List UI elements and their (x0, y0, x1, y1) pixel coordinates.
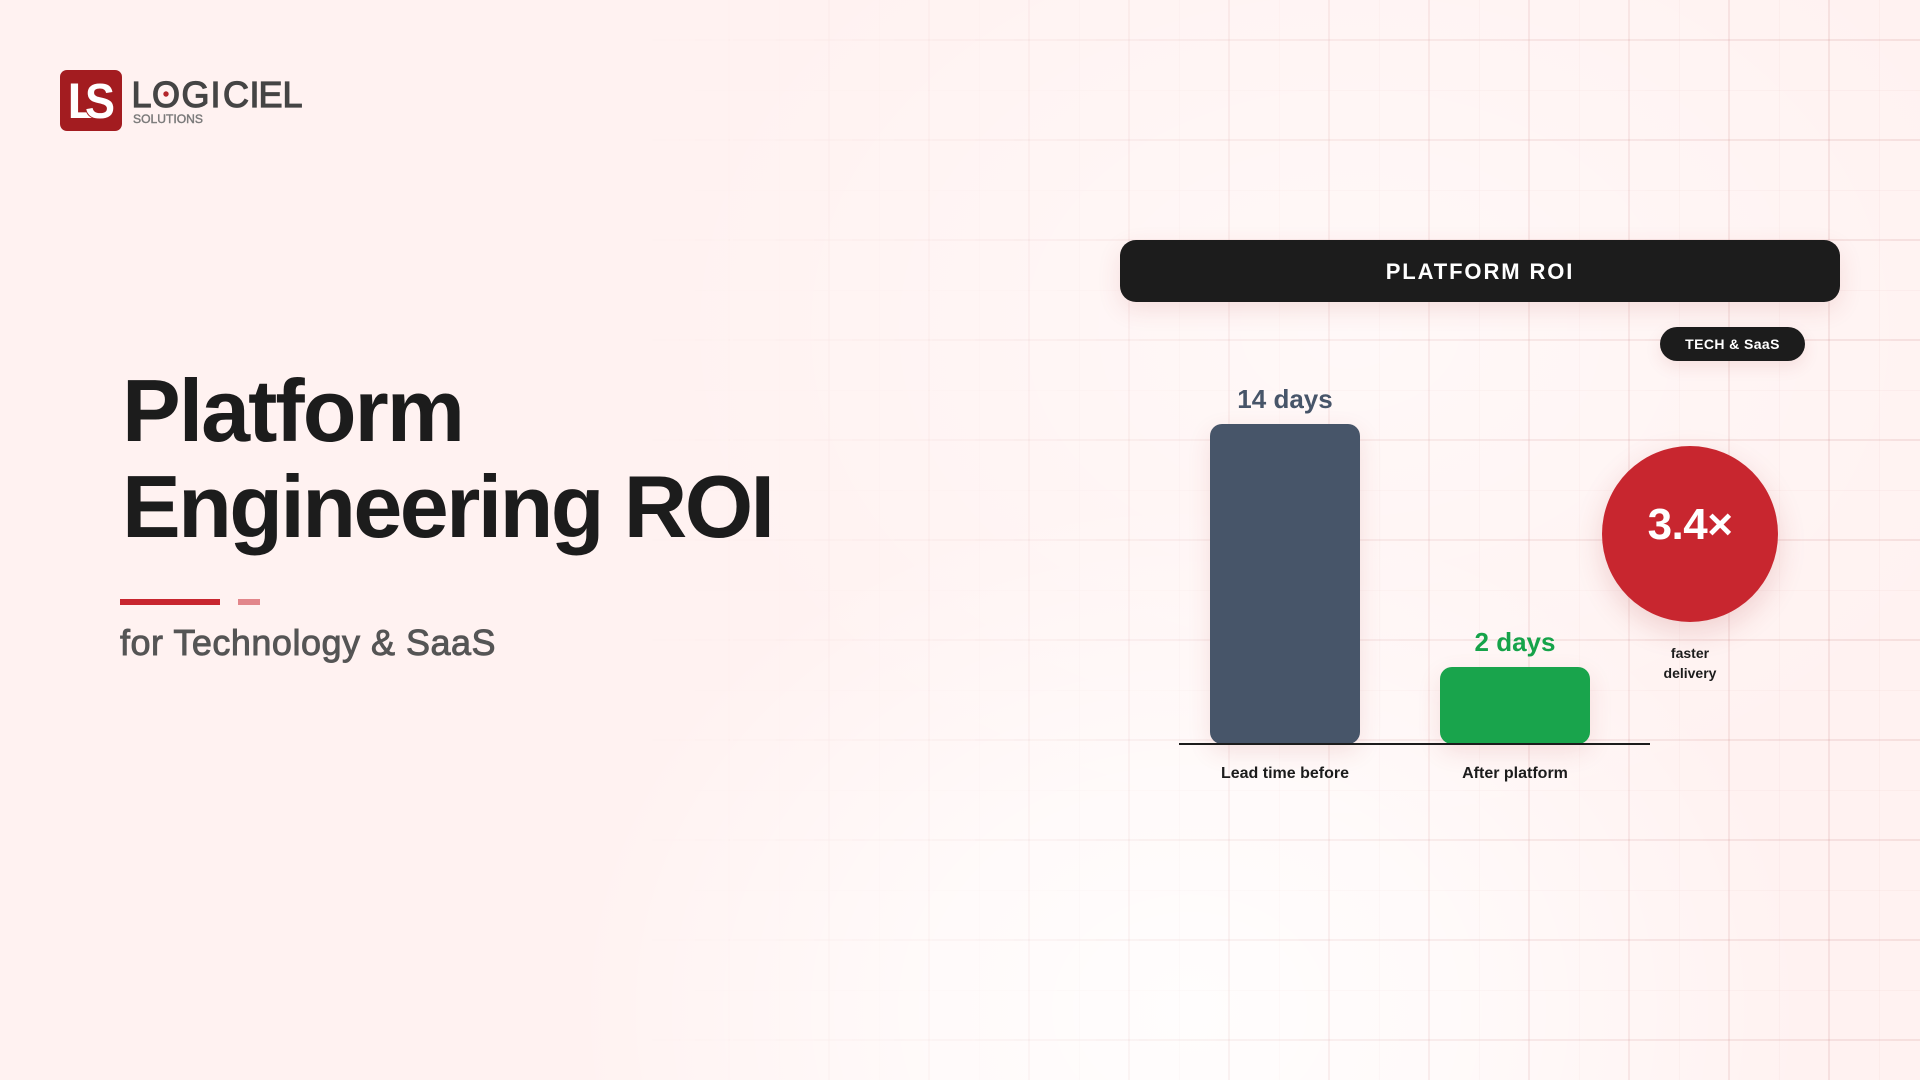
bar: after platform (1440, 667, 1590, 744)
stat caption (1664, 645, 1716, 681)
stat circle (1602, 446, 1778, 622)
background grid (928, 0, 1920, 1080)
stat caption: delivery (1664, 665, 1716, 681)
stat caption: faster (1671, 645, 1709, 661)
label: after platform: After platform (1462, 765, 1568, 782)
title: Platform (122, 361, 463, 460)
subtitle: for Technology & SaaS (120, 622, 496, 663)
value: 14 days: 14 days (1237, 384, 1333, 414)
panel heading bar (1120, 240, 1840, 302)
icon: LS square: L (68, 73, 98, 129)
bar chart: lead time (1179, 384, 1650, 782)
title (122, 361, 772, 556)
title: Engineering ROI (122, 457, 772, 556)
chart axis (1179, 743, 1650, 745)
value: 2 days: 2 days (1475, 627, 1555, 657)
wordmark: LOGICIEL (132, 74, 303, 115)
panel: platform ROI chart (1114, 240, 1846, 782)
industry tag pill: TECH & SaaS (1685, 336, 1780, 352)
bar: lead time before (1210, 424, 1360, 744)
icon: LS square (60, 70, 122, 131)
logo: Logiciel Solutions (60, 70, 303, 131)
wordmark: SOLUTIONS (133, 114, 203, 126)
icon: LS square: S (85, 75, 115, 129)
stat value: 3.4× (1648, 500, 1732, 549)
stat: faster delivery (1592, 446, 1788, 681)
industry tag pill (1660, 327, 1805, 361)
panel heading bar: PLATFORM ROI (1386, 259, 1574, 284)
accent divider (120, 599, 260, 605)
label: lead time before: Lead time before (1221, 765, 1349, 782)
